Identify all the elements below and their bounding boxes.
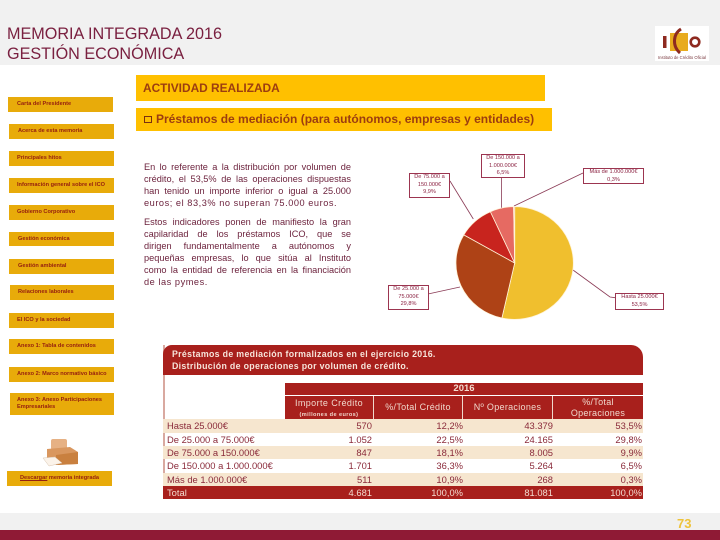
column: importe: Importe Crédito	[295, 398, 363, 408]
subheading bar	[136, 108, 552, 131]
nav: anexo 3: Anexo 3: Anexo Participaciones	[17, 397, 102, 403]
row: 25.000 a 75.000: 29,8%	[615, 434, 642, 445]
pie label: 25.000 a 75.000	[388, 285, 429, 310]
row: 25.000 a 75.000: 24.165	[524, 434, 553, 445]
nav: gestión ambiental	[9, 259, 114, 274]
logo: ICO: Instituto de Crédito Oficial	[658, 55, 706, 60]
row: hasta 25.000: 570	[356, 420, 372, 431]
row: 25.000 a 75.000: 1.052	[349, 434, 372, 445]
logo: ICO	[655, 26, 709, 61]
row: hasta 25.000: Hasta 25.000€	[167, 420, 228, 431]
pie label: 25.000 a 75.000: De 25.000 a	[393, 286, 424, 292]
nav: anexo 2	[9, 367, 114, 382]
pie label: hasta 25.000	[615, 293, 664, 310]
row: 150.000 a 1.000.000: 36,3%	[436, 460, 463, 471]
pie label: más de 1.000.000	[583, 168, 644, 184]
row: hasta 25.000: 12,2%	[436, 420, 463, 431]
column: importe	[285, 396, 374, 419]
column: total crédito: %/Total Crédito	[385, 402, 451, 412]
row: total: 100,0%	[610, 487, 642, 498]
table title band: Préstamos de mediación formalizados en el ejercicio 2016.	[172, 349, 436, 359]
nav: acerca: Acerca de esta memoria	[18, 128, 82, 134]
row: 150.000 a 1.000.000	[167, 460, 642, 471]
row: más de 1.000.000	[163, 473, 643, 486]
nav: principales: Principales hitos	[17, 155, 62, 161]
navigation sidebar	[7, 97, 114, 486]
column: total crédito	[374, 396, 463, 419]
row: 25.000 a 75.000	[167, 434, 642, 445]
row: total: Total	[167, 487, 187, 498]
body text: crédito, el 53,5% de las operaciones dispuestas	[144, 174, 351, 184]
leader lines	[428, 173, 615, 298]
nav: gobierno	[9, 205, 114, 220]
pie label: 150.000 a 1.000.000	[481, 154, 525, 178]
column: total operaciones	[571, 397, 625, 418]
row: más de 1.000.000: 268	[537, 474, 553, 485]
table column headers	[285, 396, 643, 419]
column: total operaciones: %/Total	[582, 397, 614, 407]
row: más de 1.000.000: 0,3%	[621, 474, 642, 485]
row: 25.000 a 75.000: 22,5%	[436, 434, 463, 445]
pie label: 75.000 a 150.000: De 75.000 a	[414, 174, 445, 180]
pie label: hasta 25.000: 53,5%	[632, 302, 647, 308]
table title band: Distribución de operaciones por volumen de crédito.	[172, 360, 409, 370]
nav: anexo 3: Empresariales	[17, 404, 55, 410]
body text: Estos indicadores ponen de manifiesto la gran	[144, 217, 351, 227]
row: total: 100,0%	[431, 487, 463, 498]
row: hasta 25.000: 43.379	[524, 420, 553, 431]
nav: anexo 1: Anexo 1: Tabla de contenidos	[17, 343, 96, 349]
row: 75.000 a 150.000: 18,1%	[436, 447, 463, 458]
pie chart	[429, 172, 615, 320]
table year band: 2016	[453, 383, 475, 394]
nav: gobierno: Gobierno Corporativo	[17, 209, 75, 215]
row: 150.000 a 1.000.000: 6,5%	[621, 460, 642, 471]
pie label: 25.000 a 75.000: 29,8%	[401, 301, 416, 307]
row: 150.000 a 1.000.000: De 150.000 a 1.000.000€	[167, 460, 273, 471]
nav: descarga	[7, 471, 112, 486]
pie label: 150.000 a 1.000.000: 6,5%	[497, 170, 509, 176]
row: hasta 25.000: 53,5%	[615, 420, 642, 431]
body text: de las pymes.	[144, 277, 208, 287]
nav: sociedad	[9, 313, 114, 328]
pie label: 75.000 a 150.000	[409, 173, 450, 198]
subheading bar: Préstamos de mediación (para autónomos, empresas y entidades)	[156, 112, 534, 126]
pie label: más de 1.000.000: Más de 1.000.000€	[590, 169, 637, 175]
row: 75.000 a 150.000: De 75.000 a 150.000€	[167, 447, 260, 458]
row: 150.000 a 1.000.000: 5.264	[530, 460, 553, 471]
section heading bar: ACTIVIDAD REALIZADA	[143, 81, 280, 95]
nav: anexo 2: Anexo 2: Marco normativo básico	[17, 371, 107, 377]
row: 75.000 a 150.000	[163, 446, 643, 459]
pie label: más de 1.000.000: 0,3%	[607, 177, 620, 183]
nav: anexo 1	[9, 339, 114, 354]
nav: principales	[9, 151, 114, 166]
pie label: 75.000 a 150.000: 150.000€	[418, 182, 441, 188]
nav: relaciones: Relaciones laborales	[18, 289, 74, 295]
nav: anexo 3	[10, 393, 114, 415]
nav: carta	[8, 97, 113, 112]
table year band	[285, 383, 643, 395]
pie label: hasta 25.000: Hasta 25.000€	[621, 294, 658, 300]
column: operaciones	[463, 396, 553, 419]
nav: sociedad: El ICO y la sociedad	[17, 317, 70, 323]
column: operaciones: Nº Operaciones	[474, 402, 541, 412]
title: GESTIÓN ECONÓMICA	[7, 45, 184, 63]
table title band	[163, 345, 643, 375]
nav: gestión económica: Gestión económica	[18, 236, 70, 242]
footer band	[0, 513, 720, 530]
row: más de 1.000.000: Más de 1.000.000€	[167, 474, 247, 485]
pie slices	[456, 207, 573, 319]
row: total	[163, 486, 643, 499]
page number: 73	[677, 516, 691, 531]
body text: han tenido un importe inferior o igual a 25.000	[144, 186, 351, 196]
row: total: 81.081	[524, 487, 553, 498]
nav: gestión económica	[9, 232, 114, 246]
row: hasta 25.000	[163, 419, 643, 433]
row: total: 4.681	[349, 487, 372, 498]
pie label: 25.000 a 75.000: 75.000€	[398, 294, 419, 300]
nav: carta: Carta del Presidente	[17, 101, 71, 107]
column: importe: (millones de euros)	[300, 412, 358, 418]
title	[7, 25, 222, 63]
row: más de 1.000.000: 511	[357, 474, 372, 485]
pie label: 150.000 a 1.000.000: De 150.000 a	[486, 155, 520, 161]
section heading bar	[136, 75, 545, 101]
body text: euros; el 83,3% no superan 75.000 euros.	[144, 198, 337, 208]
nav: gestión ambiental: Gestión ambiental	[18, 263, 66, 269]
pie label: 150.000 a 1.000.000: 1.000.000€	[489, 163, 517, 169]
body text	[144, 162, 351, 287]
nav: información	[9, 178, 114, 193]
column: total operaciones: Operaciones	[571, 408, 625, 418]
title: MEMORIA INTEGRADA 2016	[7, 25, 222, 43]
icon: printer	[42, 439, 78, 466]
row: 75.000 a 150.000: 847	[356, 447, 372, 458]
pie label: 75.000 a 150.000: 9,9%	[423, 189, 436, 195]
row: 75.000 a 150.000: 9,9%	[621, 447, 642, 458]
table panel	[163, 345, 643, 499]
row: 25.000 a 75.000: De 25.000 a 75.000€	[167, 434, 255, 445]
body text: dirigen fundamentalmente a autónomos y	[144, 241, 351, 251]
row: más de 1.000.000: 10,9%	[436, 474, 463, 485]
nav: descarga: Descargar memoria integrada	[20, 475, 99, 481]
nav: relaciones	[10, 285, 114, 300]
body text: pequeñas empresas, lo que sitúa al Instituto	[144, 253, 351, 263]
nav: información: Información general sobre el ICO	[17, 182, 105, 188]
body text: como la entidad de referencia en la financiación	[144, 265, 351, 275]
nav: acerca	[9, 124, 114, 139]
footer bar	[0, 530, 720, 540]
row: 150.000 a 1.000.000: 1.701	[349, 460, 372, 471]
body text: En lo referente a la distribución por volumen de	[144, 162, 351, 172]
row: 75.000 a 150.000: 8.005	[530, 447, 553, 458]
body text: capilaridad de los préstamos ICO, que se	[144, 229, 351, 239]
header band	[0, 0, 720, 65]
